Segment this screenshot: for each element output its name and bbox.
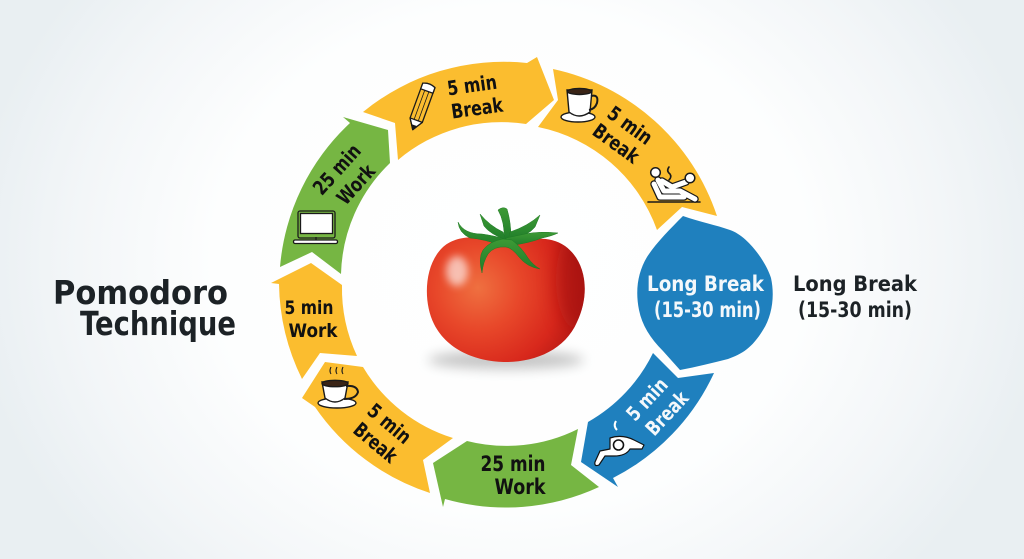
icon: resting person [595,421,644,466]
label: long break: Long Break [647,272,765,296]
icon: steaming coffee cup [318,367,358,408]
label: 5 min work: 5 min [284,297,334,319]
label: 5 min work: Work [288,320,338,342]
label: 5 min break: 5 min [363,398,416,449]
label: 25 min work: Work [331,159,380,209]
label: 5 min break: 5 min [603,101,657,150]
tomato body [427,237,585,362]
title [53,273,236,343]
segment: left 5 min work [271,263,357,379]
label: 25 min work: Work [494,475,546,499]
label: long break: (15-30 min) [654,298,761,322]
tomato leaves and stem [458,208,558,273]
segment: bottom 25 min work [433,429,599,507]
side label: long break: Long Break [793,272,918,296]
segment: lower right 5 min break [581,353,714,487]
icon: relaxing person [648,167,700,202]
label: 25 min work: 25 min [308,139,366,200]
segment: top 5 min break [363,57,554,160]
label: 5 min break: Break [450,92,505,124]
central tomato [427,208,600,369]
tomato shadow [428,351,584,369]
segment: upper right 5 min break [538,69,717,230]
title: Technique [80,304,236,343]
label: 25 min work [480,452,546,499]
label: 5 min break [588,101,657,169]
icon: coffee cup [561,88,597,122]
label: 5 min break: Break [588,118,645,169]
label: long break [647,272,765,322]
tomato highlight [446,256,468,286]
label: 5 min work [284,297,338,342]
label: 5 min break: Break [640,386,694,440]
label: 5 min break [621,373,694,440]
tomato right shading [550,242,585,332]
side label: long break: (15-30 min) [798,298,912,322]
icon: pencil [407,82,435,132]
icon: laptop [294,211,338,244]
label: 5 min break [446,70,505,124]
label: 5 min break [349,398,416,468]
label: 5 min break: 5 min [446,70,498,100]
side label: long break [793,272,918,322]
segment: upper left 25 min work [280,117,390,274]
segment: long break drop [637,216,773,370]
label: 5 min break: Break [349,417,403,468]
label: 25 min work: 25 min [480,452,546,476]
segment: lower left 5 min break [302,362,453,493]
title: Pomodoro [53,273,228,312]
label: 5 min break: 5 min [621,373,673,426]
cycle ring [271,57,773,507]
